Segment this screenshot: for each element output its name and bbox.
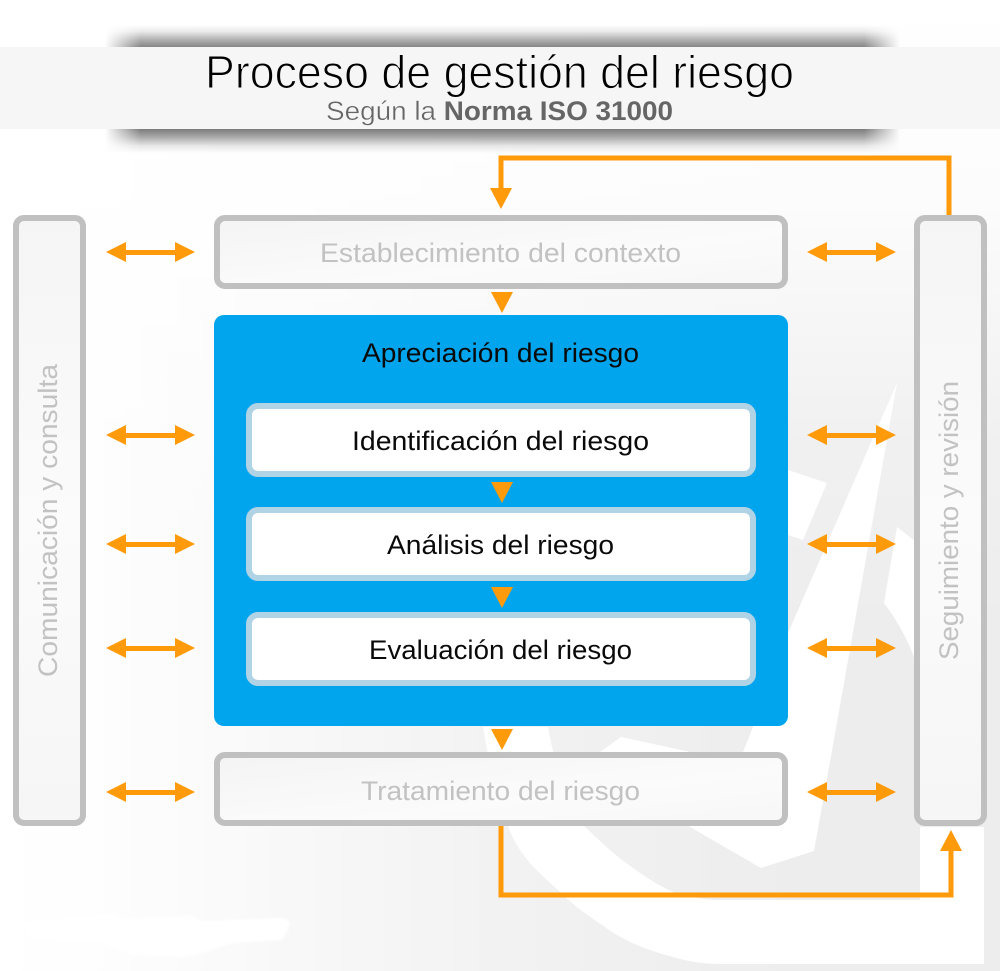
- label: tratamiento del riesgo: Tratamiento del riesgo: [361, 776, 640, 806]
- header shadows: [100, 25, 905, 153]
- label: establecimiento del contexto: Establecimiento del contexto: [320, 238, 681, 268]
- panel: comunicación y consulta: [16, 218, 83, 823]
- arrow: feedback from treatment to review: [501, 826, 962, 895]
- box: análisis del riesgo: Análisis del riesgo: [387, 530, 614, 560]
- arrow: identification to analysis: [491, 482, 513, 503]
- heading: apreciación del riesgo: Apreciación del riesgo: [362, 338, 639, 368]
- arrow: appreciation to treatment: [491, 729, 513, 750]
- label: comunicación y consulta: Comunicación y consulta: [33, 363, 63, 677]
- arrow: feedback from review to context: [490, 158, 949, 215]
- panel: apreciación del riesgo: [214, 315, 788, 726]
- arrow: analysis to evaluation: [491, 587, 513, 608]
- arrow: context to appreciation: [491, 292, 513, 313]
- box: evaluación del riesgo: [249, 615, 753, 683]
- label: seguimiento y revisión: Seguimiento y revisión: [934, 381, 964, 660]
- subtitle: Según la Norma ISO 31000: [326, 96, 673, 126]
- box: evaluación del riesgo: Evaluación del riesgo: [369, 635, 632, 665]
- box: identificación del riesgo: [249, 406, 753, 474]
- panel: establecimiento del contexto: [217, 218, 785, 286]
- arrows: left column links: [106, 242, 195, 802]
- panel: seguimiento y revisión: [917, 218, 984, 823]
- arrows: right column links: [807, 242, 896, 802]
- panel: tratamiento del riesgo: [217, 755, 785, 823]
- box: identificación del riesgo: Identificación del riesgo: [352, 426, 649, 456]
- header band: [0, 46, 1000, 129]
- box: análisis del riesgo: [249, 510, 753, 578]
- title: Proceso de gestión del riesgo: [205, 46, 794, 98]
- watermark logo shapes: [20, 383, 984, 964]
